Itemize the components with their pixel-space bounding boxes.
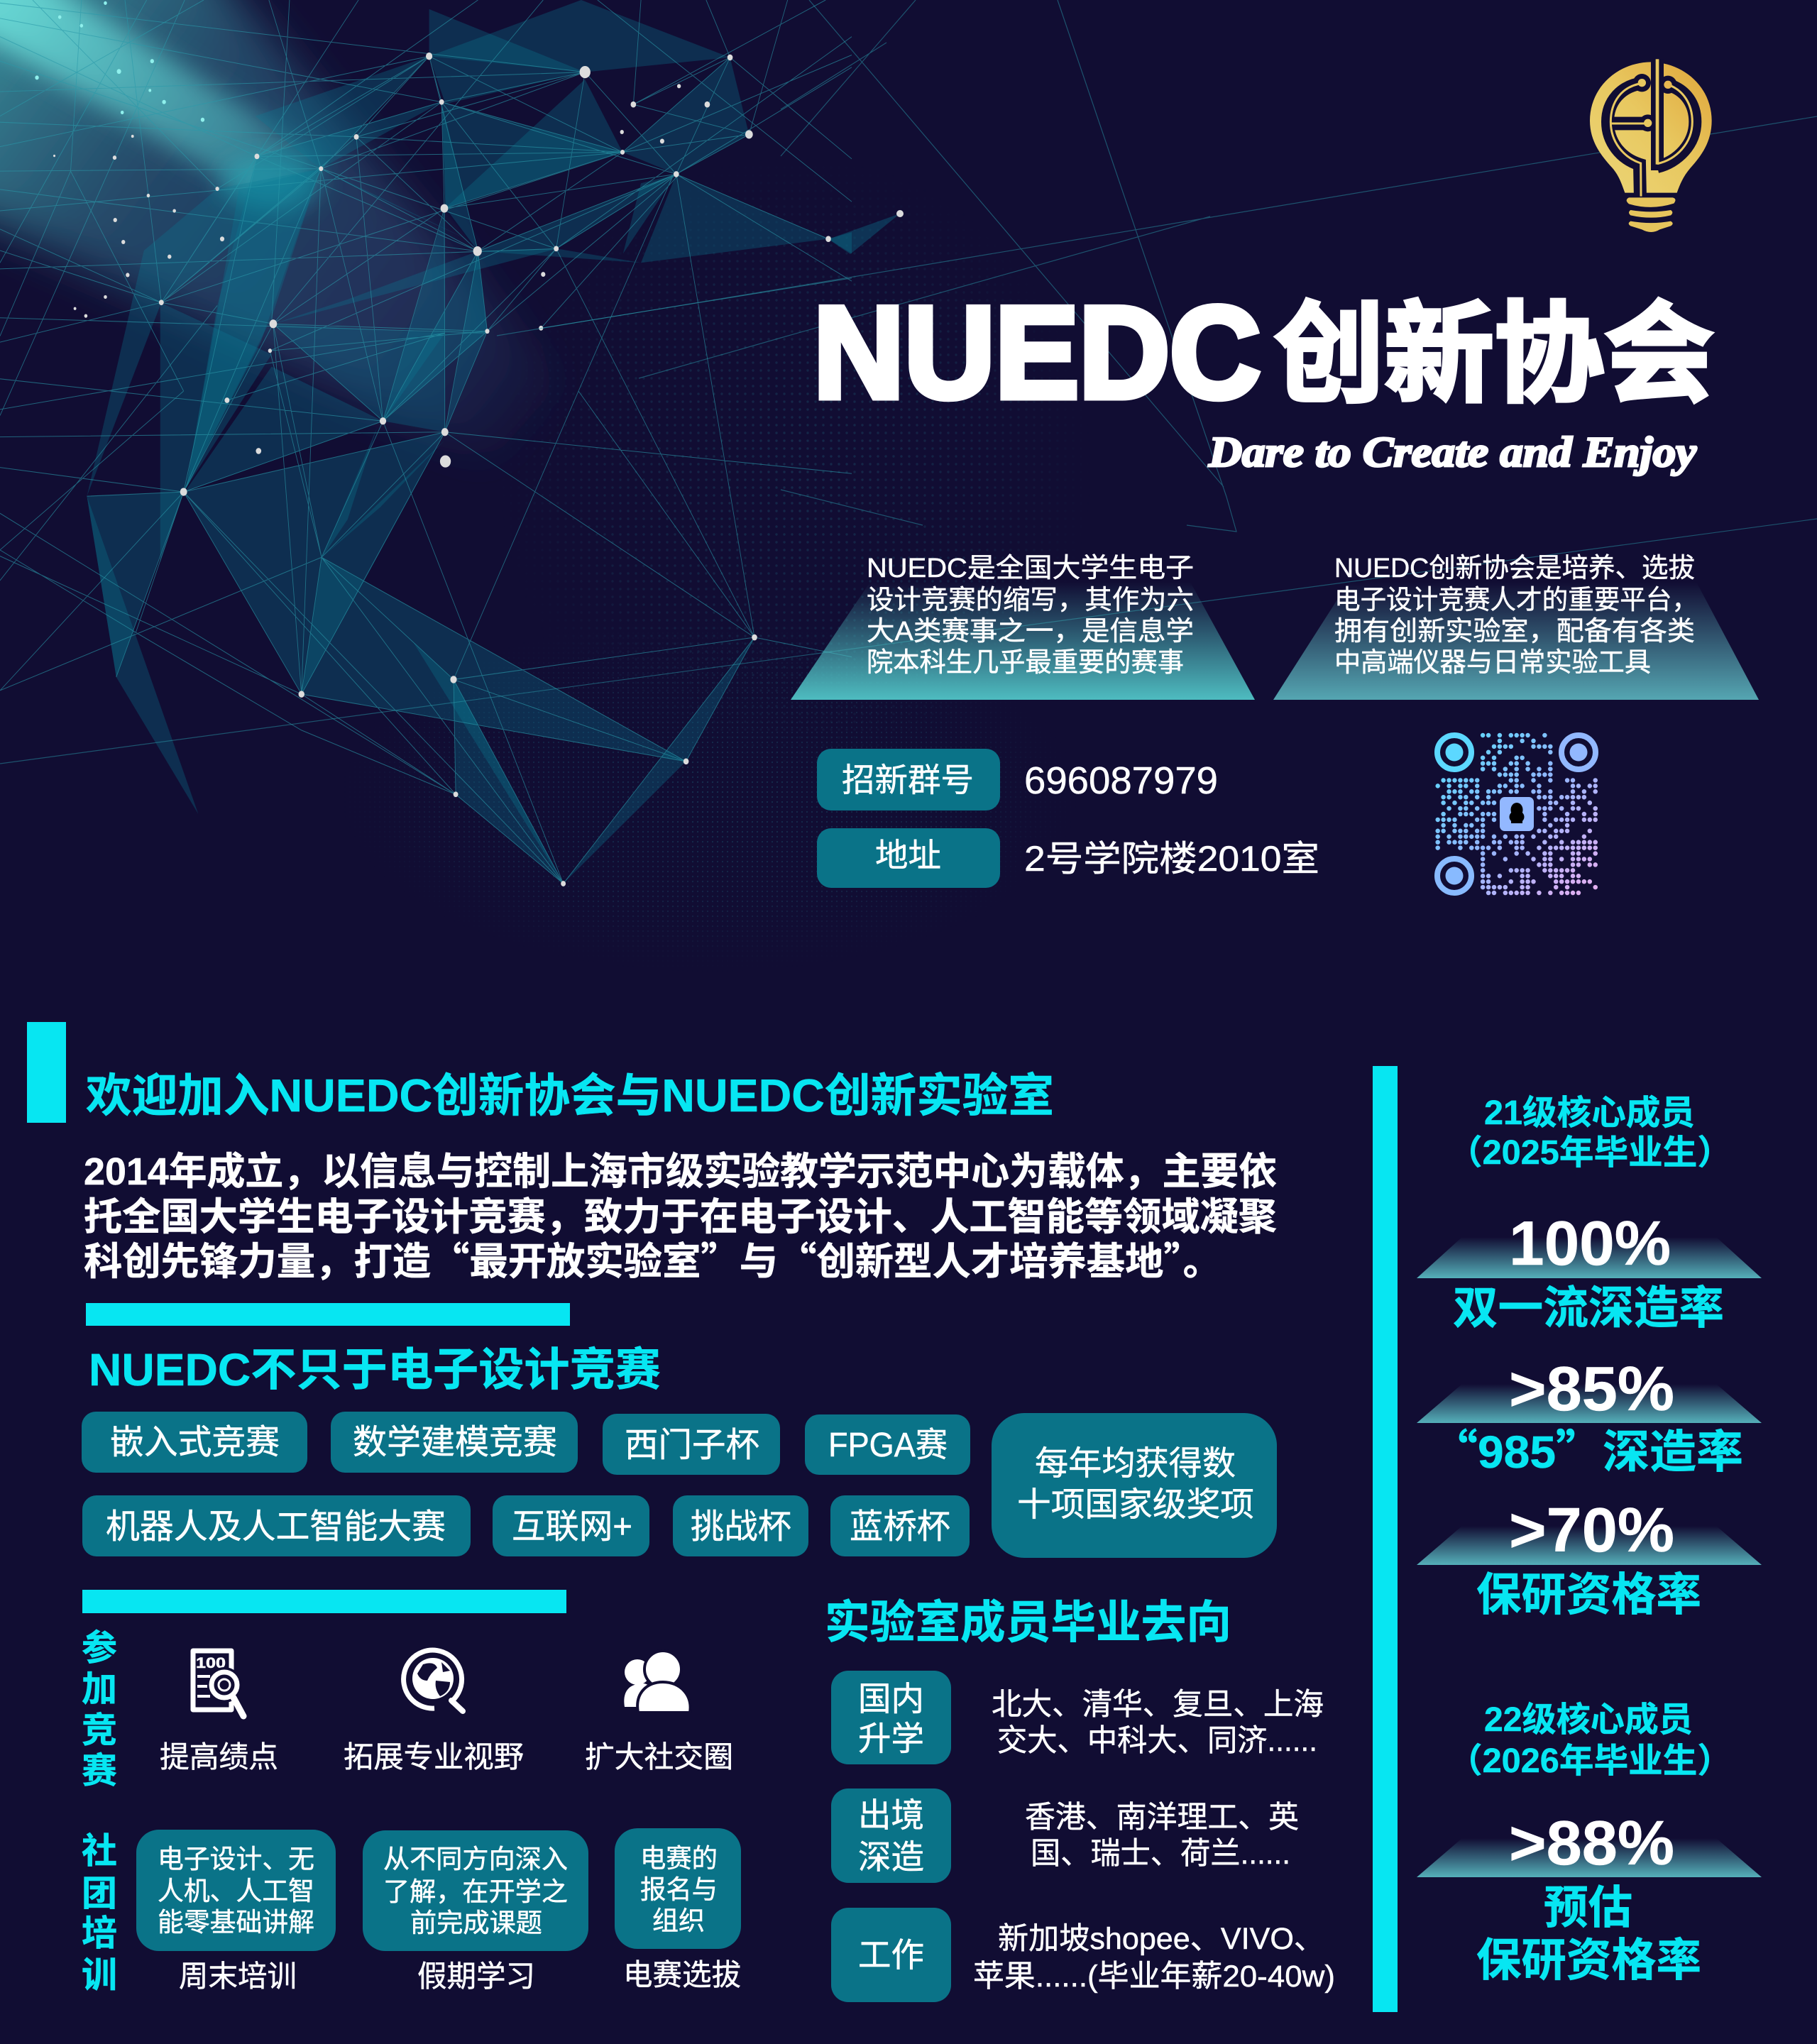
title: 创新协会 [1274, 293, 1714, 416]
destination: work: 工作 [858, 1936, 924, 1974]
stat: 70%: 保研资格率 [1476, 1569, 1701, 1620]
recruit group number: 招新群号 [842, 762, 974, 798]
heading: class of 22: （2026年毕业生） [1448, 1742, 1732, 1780]
panel: what is NUEDC [791, 554, 1255, 700]
divider bar [82, 1590, 566, 1613]
training card: contest selection [615, 1828, 741, 1991]
stat: 100%: 双一流深造率 [1453, 1282, 1724, 1334]
icon: people [624, 1651, 691, 1713]
stat: 85%: >85% [1509, 1353, 1674, 1424]
panel: what is the association: NUEDC创新协会是培养、选拔 [1334, 554, 1695, 583]
right column divider [1373, 1066, 1398, 2012]
destination: domestic [831, 1671, 1324, 1764]
title [813, 279, 1714, 425]
address: 地址 [875, 837, 941, 874]
callout: national awards [992, 1413, 1277, 1558]
label: social circle: 扩大社交圈 [585, 1740, 733, 1774]
recruit group number: 696087979 [1024, 759, 1218, 802]
vertical heading: join competitions [82, 1628, 117, 1791]
tag: blue bridge cup: 蓝桥杯 [850, 1508, 950, 1546]
vertical heading: club training: 社 [82, 1831, 117, 1871]
vertical heading: club training: 训 [82, 1955, 117, 1995]
icon: grades report: 100 [196, 1655, 226, 1671]
divider bar [86, 1303, 570, 1326]
callout: national awards: 每年均获得数 [1035, 1444, 1236, 1482]
tag: internet plus [493, 1495, 649, 1556]
destination: work: 新加坡shopee、VIVO、 [998, 1922, 1324, 1956]
section accent bar [27, 1022, 66, 1123]
heading: class of 21: （2025年毕业生） [1448, 1134, 1732, 1172]
tag: Siemens cup: 西门子杯 [625, 1427, 759, 1464]
training card: contest selection: 电赛的 [640, 1844, 718, 1873]
tag: embedded: 嵌入式竞赛 [110, 1424, 280, 1461]
destination: overseas: 深造 [858, 1838, 924, 1876]
logo: golden circuit light bulb [1590, 59, 1712, 232]
background network illustration [0, 0, 1817, 979]
address [817, 828, 1319, 888]
panel: what is the association: 中高端仪器与日常实验工具 [1334, 648, 1651, 678]
panel: what is NUEDC: 设计竞赛的缩写，其作为六 [867, 586, 1194, 615]
icon: grades report [193, 1651, 243, 1716]
tag: Siemens cup [603, 1414, 780, 1475]
training card: weekend [136, 1830, 336, 1993]
training card: weekend: 能零基础讲解 [158, 1908, 314, 1937]
stat: 100%: 100% [1509, 1208, 1671, 1278]
intro paragraph: 托全国大学生电子设计竞赛，致力于在电子设计、人工智能等领域凝聚 [84, 1196, 1277, 1238]
training card: holiday: 假期学习 [417, 1960, 535, 1993]
tag: internet plus: 互联网+ [512, 1508, 632, 1546]
panel: what is the association: 电子设计竞赛人才的重要平台， [1334, 586, 1698, 615]
destination: work: 苹果......(毕业年薪20-40w) [973, 1960, 1335, 1994]
intro paragraph: 科创先锋力量，打造“最开放实验室”与“创新型人才培养基地”。 [84, 1230, 1222, 1286]
vertical heading: join competitions: 赛 [82, 1751, 117, 1791]
panel: what is the association: 拥有创新实验室，配备有各类 [1334, 617, 1695, 647]
training card: weekend: 周末培训 [179, 1960, 297, 1993]
destination: overseas: 香港、南洋理工、英 [1025, 1801, 1299, 1835]
tag: challenge cup [673, 1495, 808, 1556]
stat: 88% [1417, 1808, 1762, 1986]
destination: domestic: 北大、清华、复旦、上海 [992, 1688, 1324, 1722]
panel: what is NUEDC: 大A类赛事之一，是信息学 [867, 617, 1194, 647]
training card: contest selection: 报名与 [640, 1875, 718, 1904]
tag: FPGA: FPGA赛 [828, 1427, 948, 1464]
stat: 88%: 保研资格率 [1476, 1935, 1701, 1986]
stat: 88%: >88% [1509, 1808, 1674, 1878]
tag: math modeling: 数学建模竞赛 [353, 1424, 557, 1461]
stat: 85% [1417, 1353, 1762, 1481]
tag: FPGA [805, 1414, 970, 1475]
tag: robotics and AI: 机器人及人工智能大赛 [106, 1508, 446, 1546]
destination: overseas [831, 1788, 1299, 1883]
vertical heading: club training: 团 [82, 1874, 117, 1913]
heading: graduate destinations: 实验室成员毕业去向 [825, 1597, 1231, 1648]
training card: weekend: 电子设计、无 [158, 1845, 314, 1874]
heading: class of 21: 21级核心成员 [1484, 1094, 1695, 1132]
tag: challenge cup: 挑战杯 [691, 1508, 791, 1546]
vertical heading: join competitions: 竞 [82, 1710, 117, 1750]
panel: what is the association [1273, 554, 1759, 700]
tag: math modeling [331, 1412, 578, 1473]
heading: more than competition: NUEDC不只于电子设计竞赛 [89, 1344, 661, 1395]
panel: what is NUEDC: NUEDC是全国大学生电子 [867, 554, 1194, 583]
QR code [1437, 735, 1596, 893]
tag: blue bridge cup [830, 1495, 970, 1556]
training card: holiday [363, 1830, 588, 1993]
training card: holiday: 了解，在开学之 [383, 1877, 568, 1906]
label: horizons: 拓展专业视野 [344, 1740, 524, 1774]
intro paragraph: 2014年成立，以信息与控制上海市级实验教学示范中心为载体，主要依 [84, 1150, 1277, 1193]
training card: holiday: 从不同方向深入 [383, 1845, 568, 1874]
panel: what is NUEDC: 院本科生几乎最重要的赛事 [867, 648, 1184, 678]
vertical heading: club training [82, 1831, 117, 1995]
title: NUEDC [813, 279, 1261, 425]
vertical heading: join competitions: 参 [82, 1628, 117, 1668]
heading: class of 22 [1448, 1701, 1732, 1780]
destination: work [831, 1908, 1335, 2002]
icon: globe search [404, 1650, 463, 1711]
tagline: Dare to Create and Enjoy [1208, 429, 1696, 476]
tag: embedded [82, 1412, 307, 1473]
callout: national awards: 十项国家级奖项 [1017, 1485, 1254, 1523]
address: 2号学院楼2010室 [1024, 839, 1319, 879]
heading: welcome: 欢迎加入NUEDC创新协会与NUEDC创新实验室 [86, 1070, 1054, 1121]
destination: overseas: 国、瑞士、荷兰...... [1031, 1837, 1290, 1871]
competition tags [82, 1412, 970, 1556]
vertical heading: club training: 培 [82, 1913, 117, 1953]
heading: class of 22: 22级核心成员 [1484, 1701, 1693, 1739]
stat: 85%: “985”深造率 [1431, 1416, 1743, 1481]
training card: contest selection: 电赛选拔 [623, 1958, 741, 1991]
destination: domestic: 升学 [858, 1720, 924, 1757]
training card: weekend: 人机、人工智 [158, 1877, 314, 1906]
training card: holiday: 前完成课题 [410, 1908, 542, 1938]
tag: robotics and AI [82, 1495, 471, 1556]
destination: overseas: 出境 [858, 1796, 924, 1834]
destination: domestic: 交大、中科大、同济...... [997, 1724, 1317, 1758]
label: GPA: 提高绩点 [160, 1740, 278, 1774]
destination: domestic: 国内 [858, 1680, 924, 1718]
heading: class of 21 [1448, 1094, 1732, 1172]
stat: 88%: 预估 [1544, 1882, 1632, 1933]
stat: 70% [1417, 1495, 1762, 1620]
stat: 100% [1417, 1208, 1762, 1334]
training card: contest selection: 组织 [652, 1906, 705, 1935]
recruit group number [817, 749, 1218, 811]
vertical heading: join competitions: 加 [82, 1669, 117, 1709]
intro paragraph [84, 1150, 1277, 1286]
stat: 70%: >70% [1509, 1495, 1674, 1565]
